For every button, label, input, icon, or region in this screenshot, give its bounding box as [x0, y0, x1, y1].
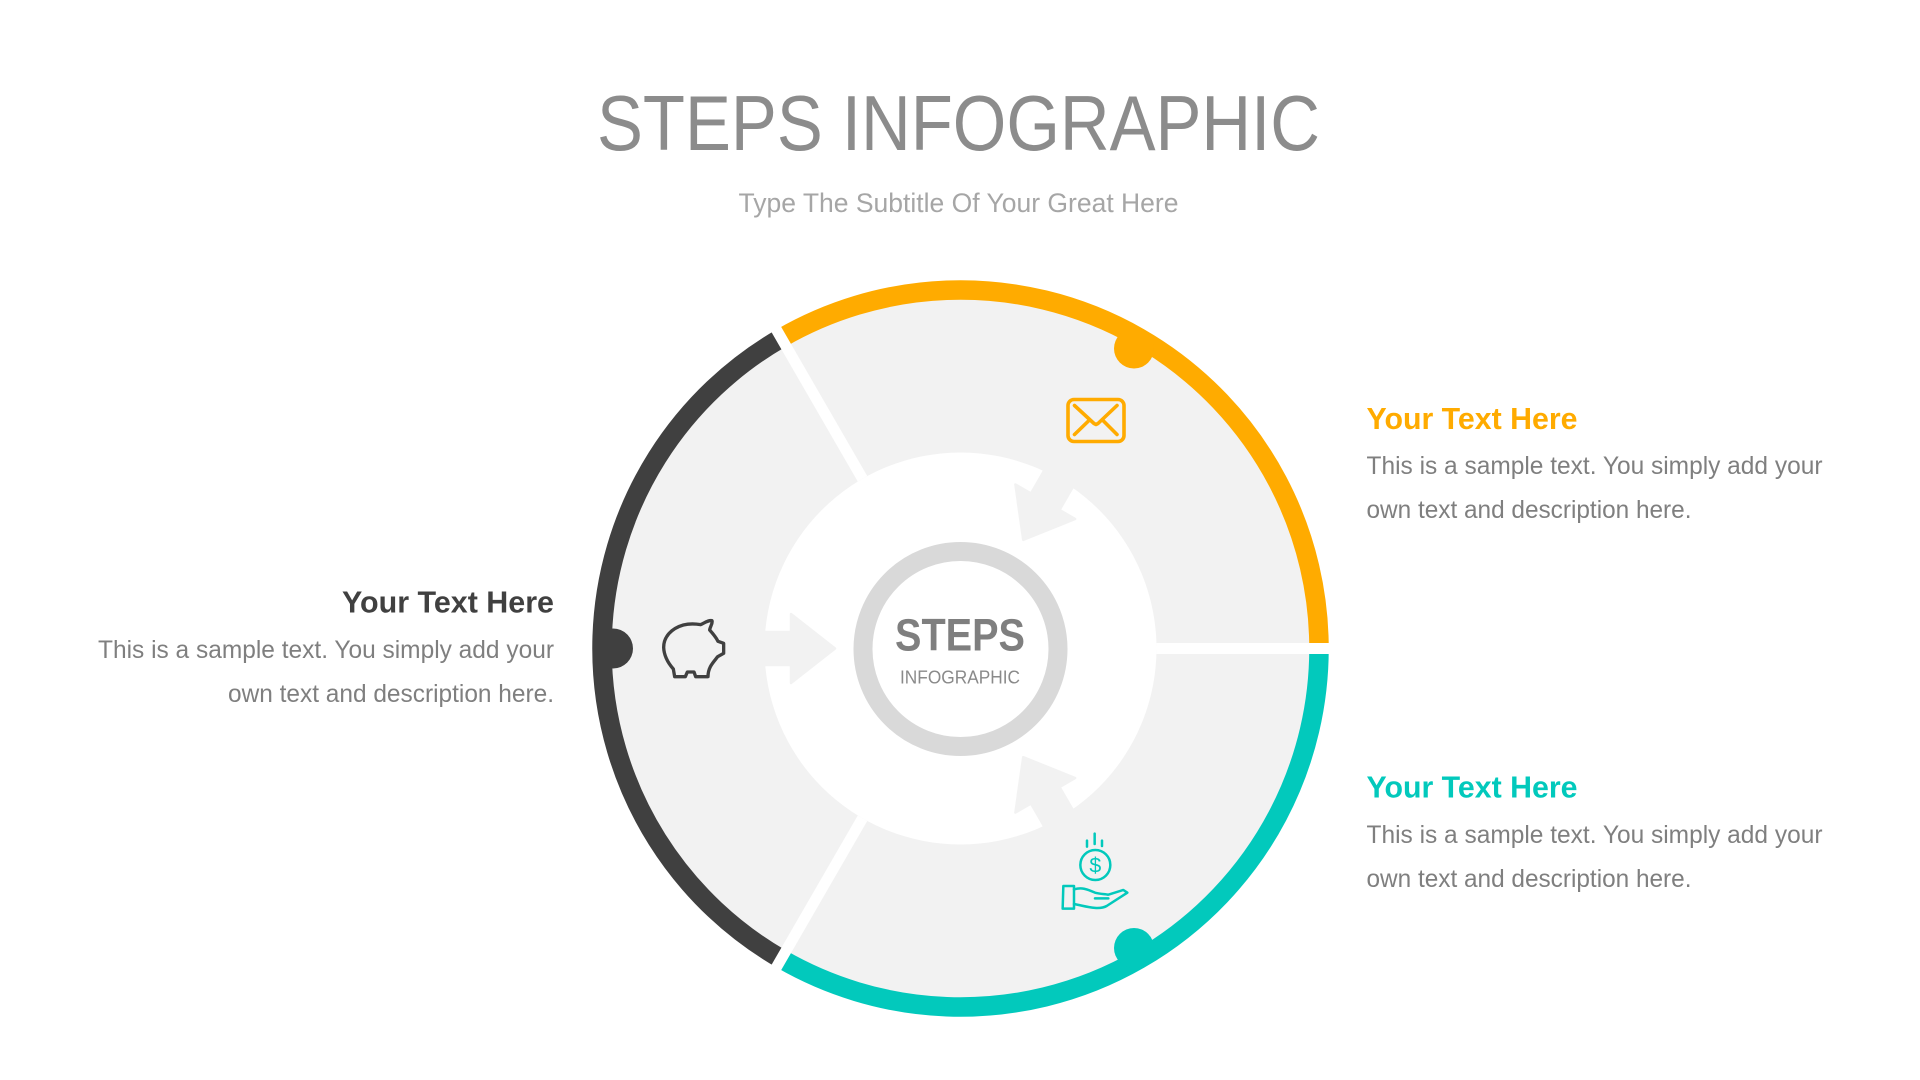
text block: teal step — [1366, 770, 1822, 893]
dark ring segment — [602, 338, 781, 959]
icon: envelope — [1068, 400, 1124, 442]
centre heading: STEPS — [895, 610, 1025, 660]
body text — [1366, 821, 1822, 893]
heading: Your Text Here — [1366, 770, 1578, 804]
icon: piggy bank — [664, 621, 724, 677]
icon: hand with coin — [1063, 834, 1127, 909]
body text: own text and description here. — [228, 680, 554, 708]
teal marker dot — [1114, 928, 1154, 968]
panel: grey sector disc — [608, 296, 1312, 1000]
dark marker dot — [593, 628, 633, 668]
body text — [1366, 452, 1822, 524]
arrow: teal sector pointing to centre — [993, 740, 1091, 839]
sector gaps — [774, 325, 1334, 972]
orange marker dot — [1114, 328, 1154, 368]
panel: white inner disc — [764, 452, 1156, 844]
heading: Your Text Here — [342, 584, 554, 620]
icon: hand with coin: $ — [1089, 854, 1101, 878]
title: STEPS INFOGRAPHIC — [597, 79, 1320, 167]
arrow: orange sector pointing to centre — [993, 458, 1091, 557]
body text: own text and description here. — [1366, 865, 1692, 893]
teal ring segment — [781, 648, 1319, 1007]
body text: This is a sample text. You simply add your — [98, 636, 554, 664]
centre subheading: INFOGRAPHIC — [900, 666, 1020, 688]
body text — [98, 636, 554, 708]
orange ring segment — [781, 290, 1319, 648]
body text: This is a sample text. You simply add your — [1366, 452, 1822, 480]
heading: Your Text Here — [1366, 401, 1578, 436]
centre hub ring — [863, 552, 1058, 746]
circular diagram — [593, 290, 1334, 1007]
text block: orange step — [1366, 401, 1822, 524]
subtitle: Type The Subtitle Of Your Great Here — [738, 188, 1178, 218]
body text: own text and description here. — [1366, 496, 1692, 524]
text block: dark step — [98, 584, 554, 708]
arrow: left sector pointing to centre — [760, 614, 835, 683]
body text: This is a sample text. You simply add your — [1366, 821, 1822, 849]
